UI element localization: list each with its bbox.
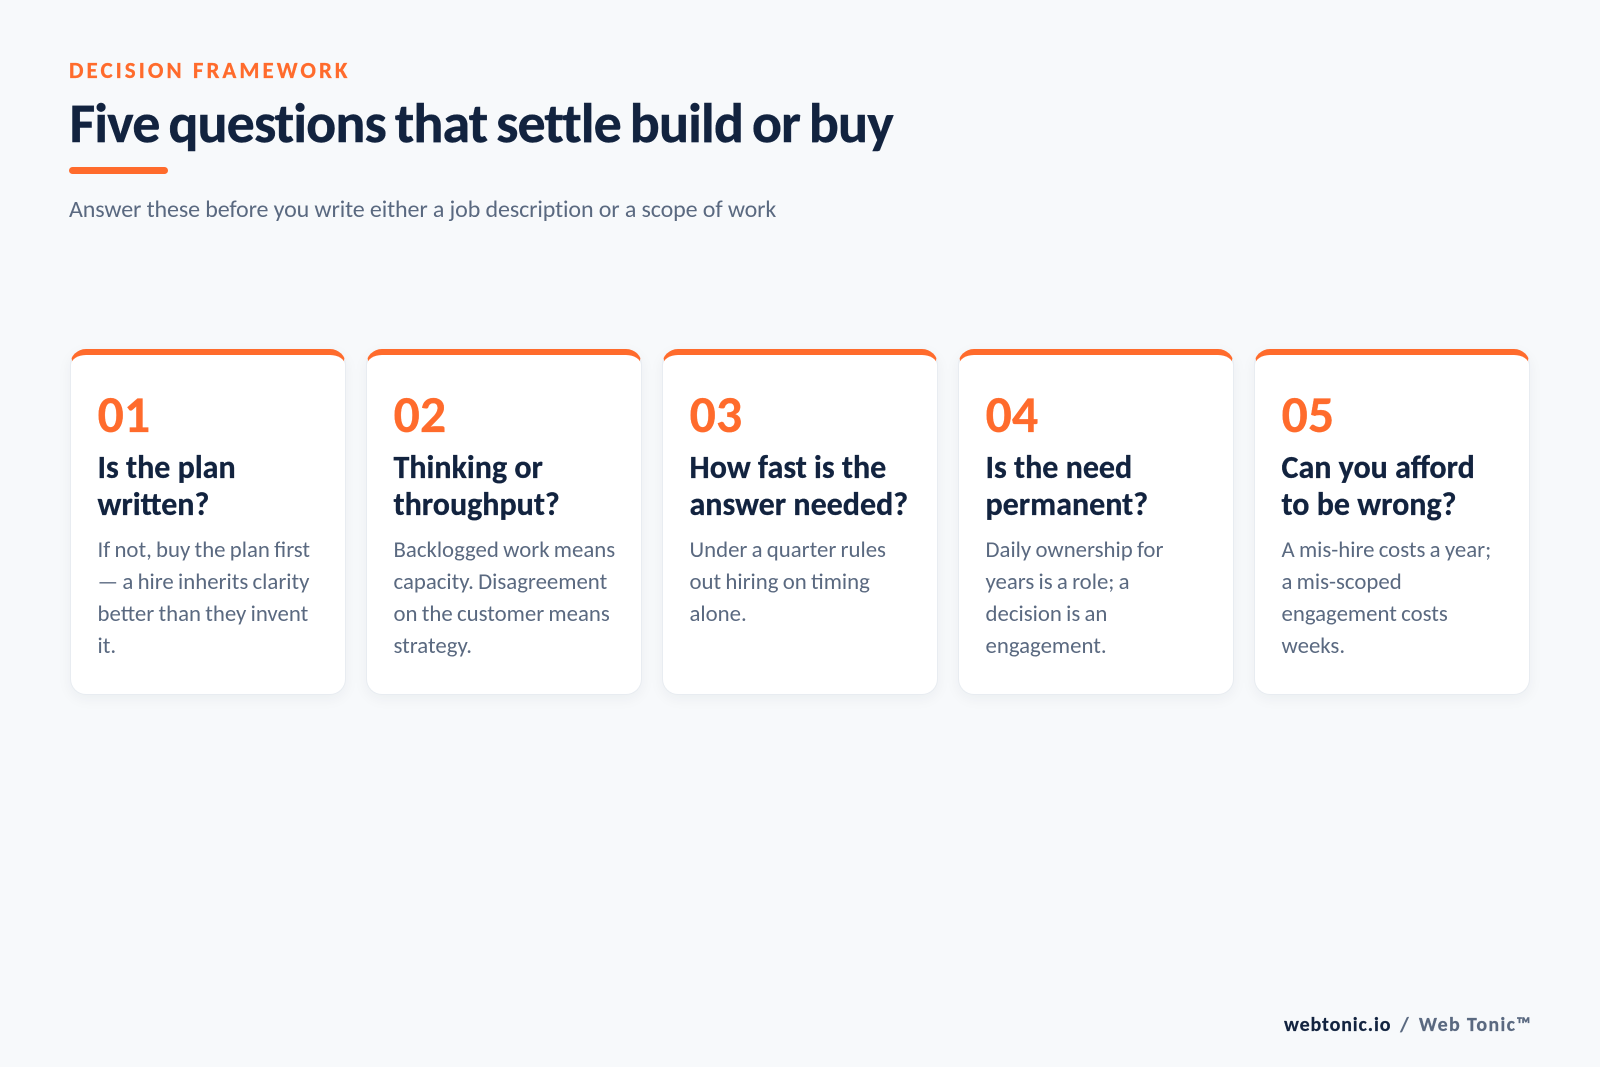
subtitle: Answer these before you write either a job description or a scope of work: [69, 195, 776, 224]
card question 01: [97, 448, 236, 524]
footer credit: webtonic.io / Web Tonic™: [1284, 1013, 1532, 1037]
card body 05: A mis-hire costs a year;: [1282, 536, 1491, 564]
card question 04: [986, 448, 1148, 524]
card body 02: Backlogged work means: [394, 536, 615, 564]
card number 01: 01: [98, 382, 150, 446]
card question 05: [1282, 448, 1475, 524]
panel: card 04: [958, 349, 1234, 695]
card body 01: [98, 536, 310, 660]
card number 02: 02: [394, 382, 446, 446]
card question 02: throughput?: [394, 485, 560, 524]
panel: card 05: [1254, 349, 1530, 695]
card question 01: Is the plan: [98, 448, 236, 487]
card body 05: [1282, 536, 1491, 660]
card body 04: [986, 536, 1163, 660]
card body 01: — a hire inherits clarity: [98, 568, 309, 596]
card question 03: answer needed?: [690, 485, 908, 524]
card body 05: engagement costs: [1282, 600, 1448, 628]
card question 01: written?: [98, 485, 209, 524]
title accent rule: [69, 167, 168, 174]
card body 02: [394, 536, 615, 660]
card question 02: [394, 448, 560, 524]
card body 03: out hiring on timing: [690, 568, 870, 596]
card body 04: engagement.: [986, 632, 1107, 660]
card body 02: strategy.: [394, 632, 472, 660]
card body 05: a mis-scoped: [1282, 568, 1402, 596]
card body 01: better than they invent: [98, 600, 308, 628]
card body 05: weeks.: [1282, 632, 1345, 660]
card body 04: decision is an: [986, 600, 1107, 628]
card body 03: [690, 536, 886, 628]
card body 03: alone.: [690, 600, 747, 628]
panel: card 01: [70, 349, 346, 695]
card question 02: Thinking or: [394, 448, 543, 487]
card body 02: on the customer means: [394, 600, 610, 628]
card question 05: Can you afford: [1282, 448, 1475, 487]
card body 01: If not, buy the plan first: [98, 536, 310, 564]
card number 05: 05: [1282, 382, 1334, 446]
card question 03: [690, 448, 908, 524]
card question 04: permanent?: [986, 485, 1148, 524]
card number 03: 03: [690, 382, 742, 446]
card question 05: to be wrong?: [1282, 485, 1456, 524]
card body 04: years is a role; a: [986, 568, 1130, 596]
card body 01: it.: [98, 632, 116, 660]
panel: card 02: [366, 349, 642, 695]
card number 04: 04: [986, 382, 1038, 446]
card question 03: How fast is the: [690, 448, 886, 487]
eyebrow label: DECISION FRAMEWORK: [69, 57, 351, 85]
card body 03: Under a quarter rules: [690, 536, 886, 564]
card body 04: Daily ownership for: [986, 536, 1163, 564]
card question 04: Is the need: [986, 448, 1132, 487]
card body 02: capacity. Disagreement: [394, 568, 607, 596]
title: Five questions that settle build or buy: [70, 90, 893, 158]
panel: card 03: [662, 349, 938, 695]
